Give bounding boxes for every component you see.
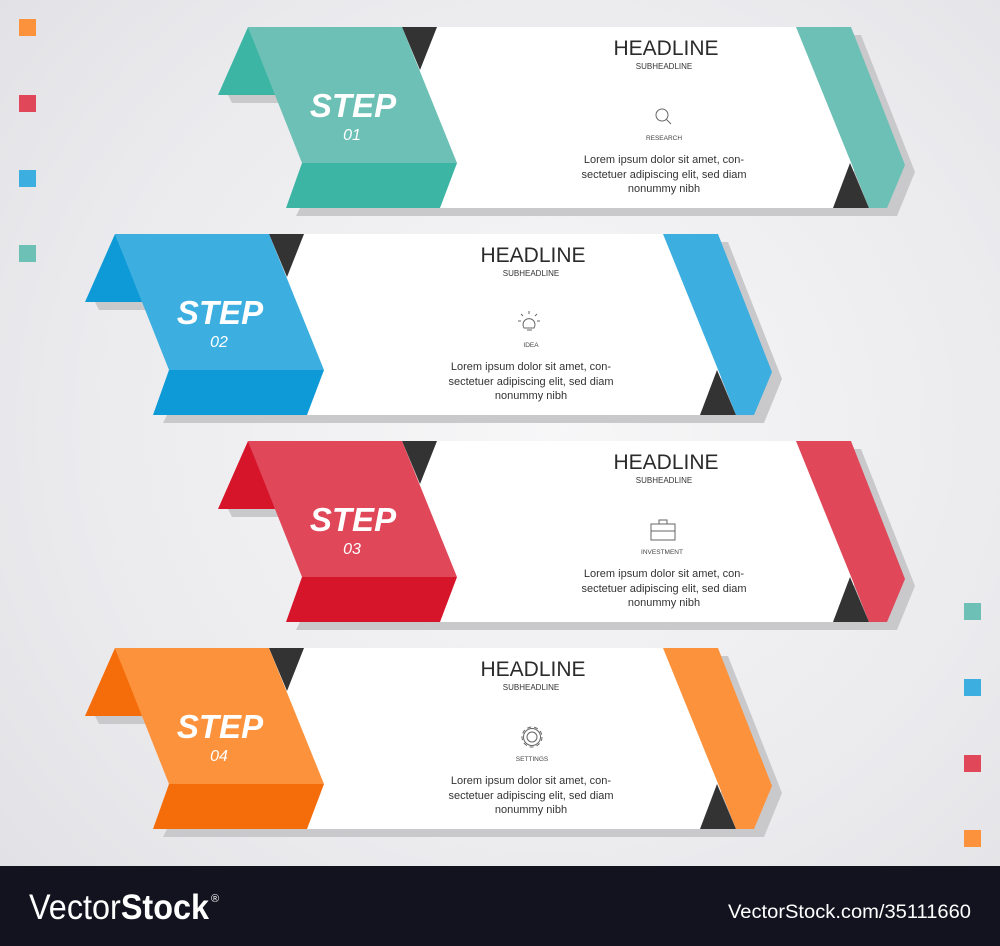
icon: briefcase	[651, 520, 675, 540]
step 3: HEADLINE	[613, 451, 719, 474]
step 4: 04	[210, 748, 228, 765]
step 1: STEP	[310, 87, 397, 124]
step 3: INVESTMENT	[641, 549, 683, 556]
step 3: STEP	[310, 501, 397, 538]
step 2: STEP	[177, 294, 264, 331]
step 2: 02	[210, 334, 228, 351]
step 2: SUBHEADLINE	[503, 269, 559, 278]
step 2: Lorem ipsum dolor sit amet, con-	[451, 361, 611, 373]
step 1: Lorem ipsum dolor sit amet, con-	[584, 154, 744, 166]
icon: magnifier	[656, 109, 671, 124]
footer	[0, 866, 1000, 946]
step 1: HEADLINE	[613, 37, 719, 60]
step 3: SUBHEADLINE	[636, 476, 692, 485]
step 2: nonummy nibh	[495, 390, 567, 402]
footer: VectorStock	[29, 888, 209, 927]
step 3: Lorem ipsum dolor sit amet, con-	[584, 568, 744, 580]
step 4: nonummy nibh	[495, 804, 567, 816]
step 4: SETTINGS	[516, 756, 549, 763]
side squares left	[19, 19, 36, 262]
step 1: RESEARCH	[646, 135, 682, 142]
step 3: nonummy nibh	[628, 597, 700, 609]
step 4: HEADLINE	[480, 658, 586, 681]
step 4: sectetuer adipiscing elit, sed diam	[448, 790, 614, 802]
step 1: 01	[343, 127, 361, 144]
side squares right	[964, 603, 981, 847]
step 3: sectetuer adipiscing elit, sed diam	[581, 583, 747, 595]
icon: gear	[522, 727, 542, 747]
step 4: Lorem ipsum dolor sit amet, con-	[451, 775, 611, 787]
step 4: SUBHEADLINE	[503, 683, 559, 692]
step 3: 03	[343, 541, 361, 558]
footer: VectorStock.com/35111660	[728, 902, 971, 923]
step 1: sectetuer adipiscing elit, sed diam	[581, 169, 747, 181]
step 4: STEP	[177, 708, 264, 745]
step 3	[218, 441, 915, 630]
step 1: SUBHEADLINE	[636, 62, 692, 71]
step 2: HEADLINE	[480, 244, 586, 267]
step 4	[85, 648, 782, 837]
step 2: IDEA	[523, 342, 539, 349]
step 2: sectetuer adipiscing elit, sed diam	[448, 376, 614, 388]
footer: ®	[211, 893, 219, 905]
icon: lightbulb	[518, 311, 540, 330]
step 1	[218, 27, 915, 216]
step 2	[85, 234, 782, 423]
step 1: nonummy nibh	[628, 183, 700, 195]
